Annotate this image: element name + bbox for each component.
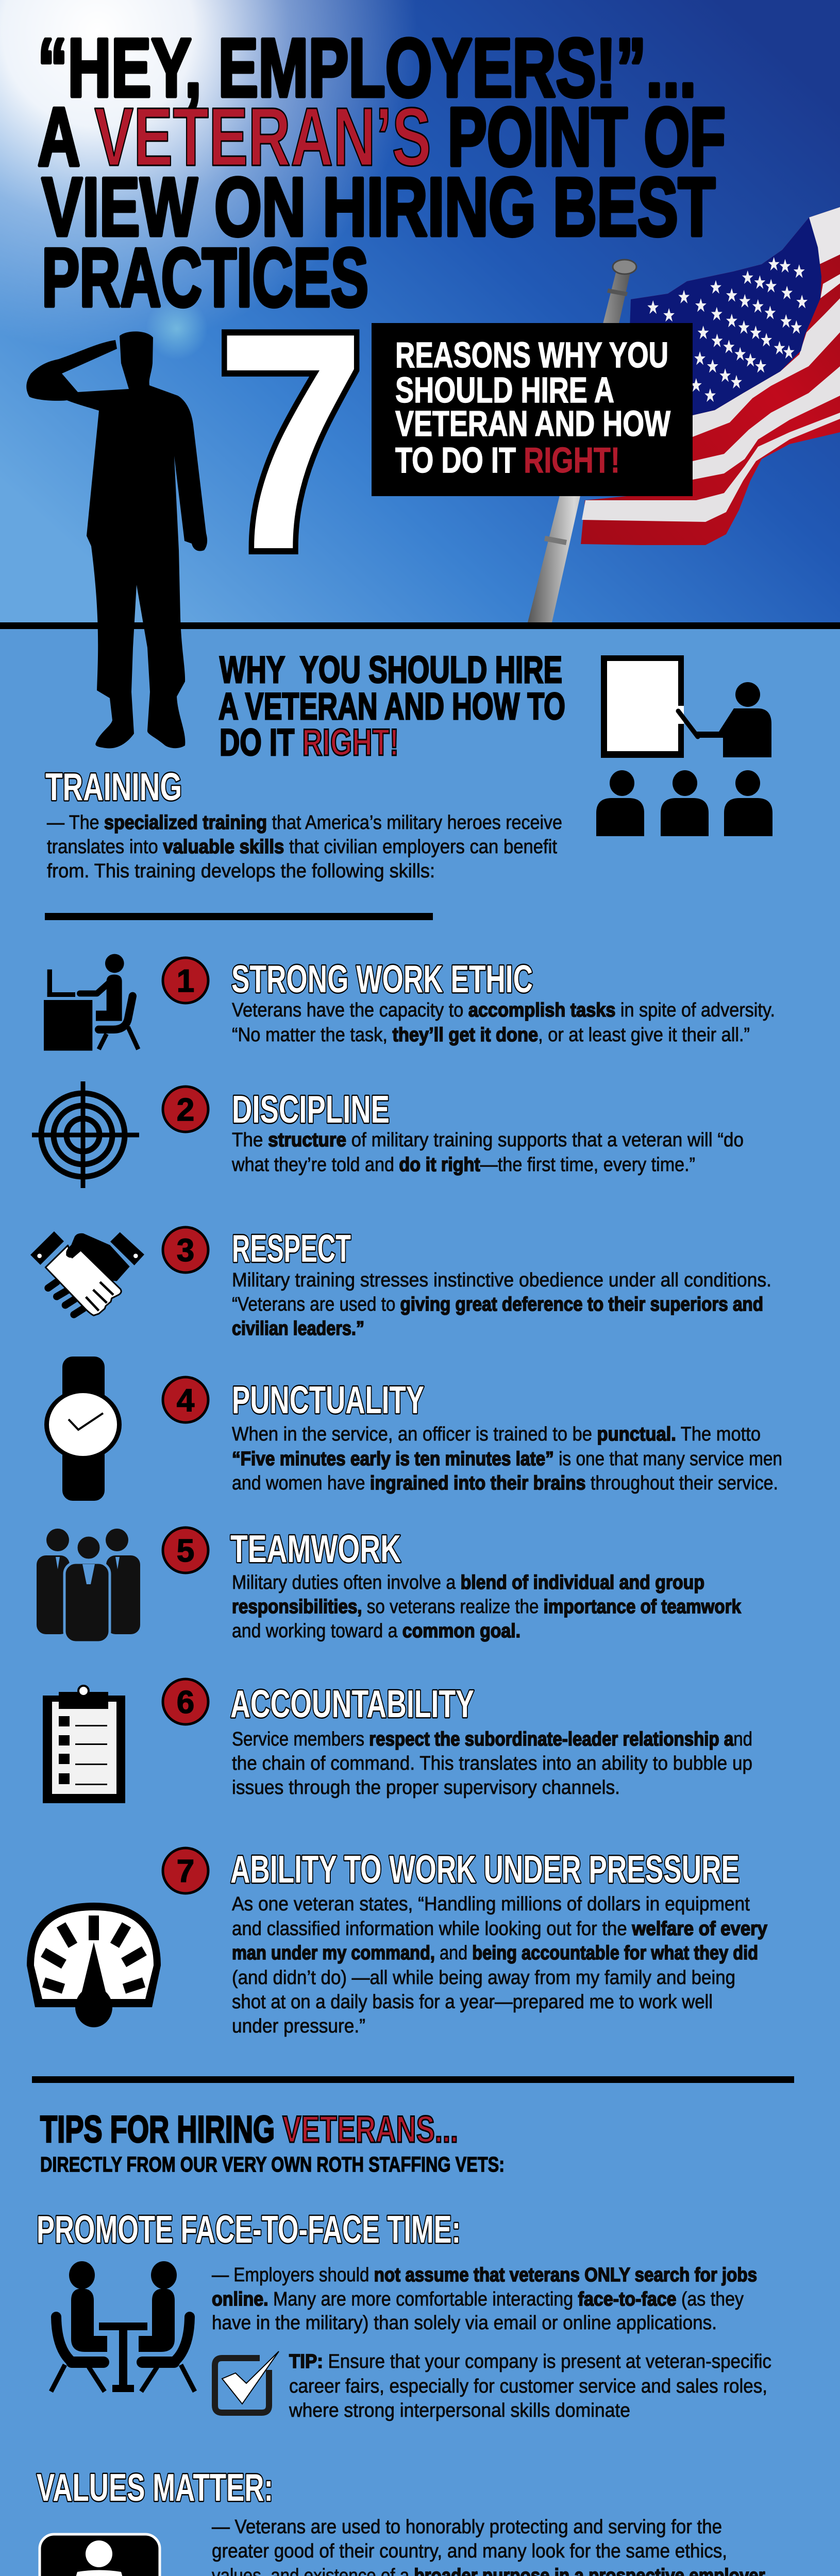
- section heading: why hire a veteran: WHY YOU SHOULD HIRE: [220, 649, 562, 691]
- icon: target: [32, 1081, 139, 1188]
- description: — Veterans are used to honorably protecting and serving for the: [212, 2516, 722, 2538]
- icon: pressure gauge: [27, 1903, 161, 2027]
- number badge 7: 7: [177, 1854, 194, 1889]
- skill 5: teamwork: [37, 1527, 742, 1642]
- description: issues through the proper supervisory channels.: [232, 1777, 620, 1799]
- number badge 6: 6: [177, 1685, 194, 1720]
- title: PRACTICES: [42, 231, 368, 324]
- number badge 3: [163, 1227, 208, 1273]
- description: greater good of their country, and many look for the same ethics,: [212, 2540, 727, 2562]
- number badge 2: [163, 1087, 208, 1132]
- tip 2: values matter: [37, 2466, 769, 2576]
- description: The structure of military training supports that a veteran will “do: [232, 1129, 744, 1151]
- flag pole: [528, 260, 636, 622]
- number badge 5: 5: [177, 1533, 194, 1569]
- black callout box: VETERAN AND HOW: [395, 403, 670, 444]
- heading: RESPECT: [232, 1227, 351, 1270]
- number badge 4: 4: [177, 1383, 195, 1418]
- tip text: where strong interpersonal skills dominate: [289, 2400, 630, 2421]
- description: [232, 1728, 752, 1799]
- training heading: TRAINING: [45, 765, 182, 808]
- training paragraph: [47, 812, 562, 882]
- description: [232, 1269, 771, 1340]
- skill 6: accountability: [43, 1679, 752, 1803]
- description: shot at on a daily basis for a year—prepared me to work well: [232, 1991, 713, 2013]
- description: [232, 1572, 742, 1642]
- skill 7: ability to work under pressure: [27, 1848, 767, 2037]
- black callout box: REASONS WHY YOU: [395, 335, 668, 375]
- description: — Employers should not assume that veterans ONLY search for jobs: [212, 2264, 757, 2286]
- description: online. Many are more comfortable interacting face-to-face (as they: [212, 2289, 744, 2310]
- skill 1: strong work ethic: [44, 954, 775, 1050]
- tip text: [289, 2351, 771, 2421]
- black callout box: SHOULD HIRE A: [395, 370, 614, 410]
- number badge 4: [163, 1377, 208, 1422]
- description: [232, 1423, 782, 1494]
- number badge 5: [163, 1528, 208, 1573]
- icon: two people at table: [51, 2261, 195, 2392]
- skill 2: discipline: [32, 1081, 744, 1188]
- training paragraph: — The specialized training that America’s military heroes receive: [47, 812, 562, 834]
- number 7: 7: [215, 269, 366, 614]
- heading: TEAMWORK: [230, 1527, 401, 1570]
- description: the chain of command. This translates into an ability to bubble up: [232, 1753, 752, 1774]
- american flag: [581, 207, 840, 545]
- icon: person with heart: [40, 2534, 160, 2576]
- icon: handshake: [30, 1231, 144, 1315]
- icon: wristwatch: [44, 1357, 122, 1501]
- description: and women have ingrained into their brains throughout their service.: [232, 1472, 778, 1494]
- icon: saluting soldier silhouette: [26, 331, 207, 749]
- skill 3: respect: [30, 1227, 771, 1340]
- heading: VALUES MATTER:: [37, 2466, 273, 2509]
- black callout box: TO DO IT RIGHT!: [395, 440, 620, 480]
- black divider under hero: [0, 622, 840, 629]
- tips heading: TIPS FOR HIRING VETERANS...: [40, 2109, 458, 2150]
- section heading: why hire a veteran: A VETERAN AND HOW TO: [219, 686, 565, 727]
- icon: checkbox: [215, 2351, 279, 2413]
- tip 1: promote face-to-face time: [37, 2208, 771, 2421]
- tip text: TIP: Ensure that your company is present at veteran-specific: [289, 2351, 771, 2372]
- title: A VETERAN’S POINT OF: [38, 91, 726, 183]
- description: (and didn’t do) —all while being away from my family and being: [232, 1967, 735, 1989]
- description: man under my command, and being accountable for what they did: [232, 1942, 758, 1964]
- number badge 6: [163, 1679, 208, 1724]
- section heading: why hire a veteran: [219, 649, 565, 764]
- description: As one veteran states, “Handling millions of dollars in equipment: [232, 1893, 750, 1915]
- skill 4: punctuality: [44, 1357, 782, 1501]
- description: Service members respect the subordinate-leader relationship and: [232, 1728, 752, 1750]
- description: [232, 999, 775, 1046]
- description: “Veterans are used to giving great deference to their superiors and: [232, 1294, 763, 1315]
- heading: STRONG WORK ETHIC: [231, 957, 533, 1001]
- training paragraph: from. This training develops the following skills:: [47, 860, 435, 882]
- description: have in the military) than solely via email or online applications.: [212, 2312, 717, 2334]
- number badge 3: 3: [177, 1233, 194, 1268]
- description: [232, 1893, 767, 2037]
- description: Military training stresses instinctive obedience under all conditions.: [232, 1269, 771, 1291]
- description: [231, 1129, 744, 1176]
- heading: PROMOTE FACE-TO-FACE TIME:: [37, 2208, 461, 2251]
- heading: DISCIPLINE: [232, 1088, 390, 1131]
- sky background: [0, 0, 840, 622]
- description: When in the service, an officer is trained to be punctual. The motto: [232, 1423, 761, 1445]
- training paragraph: translates into valuable skills that civilian employers can benefit: [47, 836, 557, 858]
- description: [212, 2516, 769, 2576]
- description: and working toward a common goal.: [232, 1620, 520, 1642]
- black callout box: [372, 323, 693, 496]
- description: “No matter the task, they’ll get it done, or at least give it their all.”: [232, 1024, 750, 1046]
- number badge 7: [163, 1848, 208, 1893]
- icon: clipboard checklist: [43, 1686, 125, 1803]
- heading: ACCOUNTABILITY: [230, 1682, 474, 1725]
- description: what they’re told and do it right—the first time, every time.”: [231, 1154, 695, 1176]
- icon: presenter with audience: [596, 655, 772, 836]
- heading: PUNCTUALITY: [232, 1378, 424, 1421]
- title: [38, 22, 726, 324]
- description: Veterans have the capacity to accomplish tasks in spite of adversity.: [232, 999, 775, 1021]
- tip text: career fairs, especially for customer service and sales roles,: [289, 2376, 767, 2397]
- number badge 1: [163, 958, 208, 1003]
- icon: team of three: [37, 1529, 140, 1642]
- icon: person at desk: [44, 954, 138, 1050]
- description: Military duties often involve a blend of individual and group: [232, 1572, 704, 1594]
- description: [212, 2264, 757, 2334]
- number badge 1: 1: [177, 963, 194, 999]
- description: and classified information while looking out for the welfare of every: [232, 1918, 767, 1940]
- description: under pressure.”: [232, 2015, 365, 2037]
- tips heading: [40, 2109, 505, 2176]
- hero banner: [0, 0, 840, 622]
- description: responsibilities, so veterans realize the importance of teamwork: [232, 1596, 742, 1618]
- number badge 2: 2: [177, 1092, 194, 1128]
- description: civilian leaders.”: [232, 1318, 364, 1340]
- tips heading: DIRECTLY FROM OUR VERY OWN ROTH STAFFING VETS:: [40, 2153, 505, 2176]
- section heading: why hire a veteran: DO IT RIGHT!: [220, 722, 399, 764]
- flag stars: [647, 257, 808, 402]
- description: “Five minutes early is ten minutes late” is one that many service men: [232, 1448, 782, 1470]
